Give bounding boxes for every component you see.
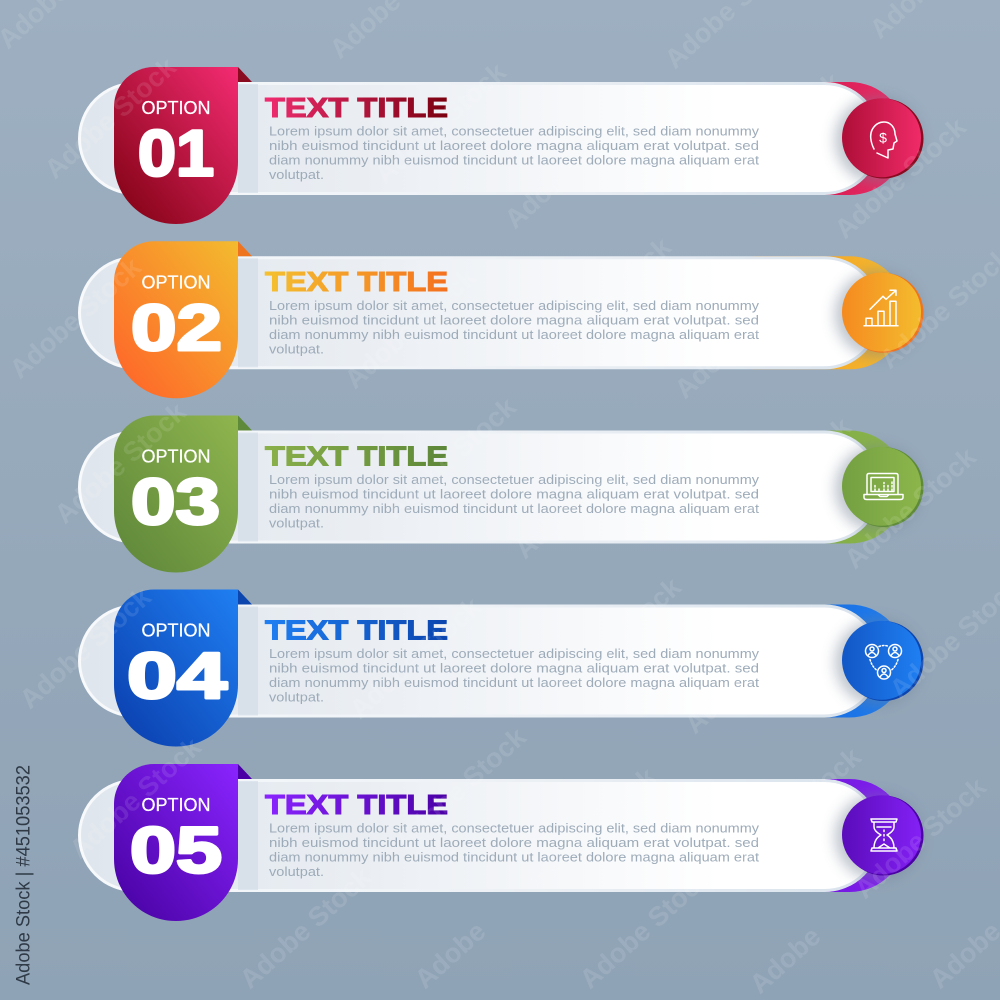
- watermark pattern: Adobe Stock: [499, 101, 642, 234]
- title 01: TEXT TITLE: [265, 92, 448, 123]
- title 04: TEXT TITLE: [265, 614, 448, 645]
- number 01: 01: [138, 116, 214, 190]
- body text 05: nibh euismod tincidunt ut laoreet dolore magna aliquam erat volutpat. sed: [269, 835, 759, 850]
- panel: option 01: [80, 67, 924, 224]
- body text 03: diam nonummy nibh euismod tincidunt ut laoreet dolore magna aliquam erat: [269, 501, 759, 516]
- stock id side label: Adobe Stock | #451053532: [14, 765, 34, 985]
- watermark pattern: Adobe Stock: [849, 771, 992, 904]
- watermark pattern: Adobe Stock: [379, 391, 522, 524]
- card 03: [80, 432, 921, 542]
- card 05: [80, 780, 921, 890]
- body text 04: Lorem ipsum dolor sit amet, consectetuer adipiscing elit, sed diam nonummy: [269, 646, 760, 661]
- icon badge 05: hourglass: [842, 795, 924, 876]
- body text 03: nibh euismod tincidunt ut laoreet dolore magna aliquam erat volutpat. sed: [269, 486, 759, 502]
- watermark pattern: Adobe Stock: [64, 731, 207, 864]
- ribbon 05: [114, 764, 252, 921]
- ribbon 03: [114, 416, 252, 572]
- body text 02: Lorem ipsum dolor sit amet, consectetuer adipiscing elit, sed diam nonummy: [269, 298, 760, 313]
- watermark pattern: Adobe Stock: [669, 271, 812, 404]
- title 02: TEXT TITLE: [265, 266, 448, 297]
- watermark pattern: Adobe Stock: [704, 66, 847, 199]
- panel: option 05: [80, 764, 924, 921]
- watermark pattern: Adobe Stock: [829, 111, 972, 244]
- icon badge 03: laptop: [842, 447, 924, 527]
- body text 05: volutpat.: [269, 864, 324, 879]
- option label 03: OPTION: [141, 446, 211, 466]
- body text 03: Lorem ipsum dolor sit amet, consectetuer adipiscing elit, sed diam nonummy: [269, 472, 760, 487]
- panel: option 02: [80, 241, 924, 398]
- option label 02: OPTION: [141, 272, 211, 292]
- watermark pattern: Adobe Stock: [724, 741, 867, 874]
- body text 01: volutpat.: [269, 167, 324, 182]
- number 05: 05: [130, 814, 222, 886]
- ribbon 01: [114, 67, 252, 224]
- option label 05: OPTION: [141, 795, 211, 815]
- watermark pattern: Adobe Stock: [14, 581, 157, 714]
- ribbon 04: [114, 590, 252, 746]
- back pill 02: [700, 256, 906, 369]
- body text 04: volutpat.: [269, 690, 324, 704]
- watermark pattern: Adobe Stock: [519, 761, 662, 894]
- watermark pattern: Adobe Stock: [49, 396, 192, 529]
- watermark pattern: Adobe Stock: [714, 411, 857, 544]
- body text 03: volutpat.: [269, 516, 324, 530]
- watermark pattern: Adobe: [744, 921, 826, 999]
- card 01: [80, 84, 921, 194]
- back pill 05: [700, 779, 906, 892]
- number 02: 02: [131, 291, 222, 364]
- body text 01: Lorem ipsum dolor sit amet, consectetuer adipiscing elit, sed diam nonummy: [269, 124, 760, 138]
- body text 05: Lorem ipsum dolor sit amet, consectetuer adipiscing elit, sed diam nonummy: [269, 820, 760, 836]
- body text 05: diam nonummy nibh euismod tincidunt ut laoreet dolore magna aliquam erat: [269, 850, 759, 864]
- watermark pattern: Adobe Stock: [234, 861, 377, 994]
- icon badge 01: head with dollar: [842, 98, 924, 178]
- option label 01: OPTION: [141, 98, 211, 118]
- back pill 01: [700, 82, 906, 195]
- body text 02: volutpat.: [269, 341, 324, 356]
- number 04: 04: [127, 639, 227, 712]
- watermark pattern: Adobe Stock: [509, 431, 652, 564]
- watermark pattern: Adobe Stock: [679, 606, 822, 739]
- watermark pattern: Adobe Stock: [4, 251, 147, 384]
- card 04: [80, 606, 921, 716]
- watermark pattern: Adobe Stock: [574, 861, 717, 994]
- body text 01: nibh euismod tincidunt ut laoreet dolore magna aliquam erat volutpat. sed: [269, 138, 759, 153]
- watermark pattern: Adobe: [409, 916, 491, 994]
- watermark pattern: Adobe Stock: [839, 441, 982, 574]
- watermark pattern: Adobe Stock: [544, 571, 687, 704]
- icon badge 04: people network: [842, 621, 924, 701]
- panel: option 03: [80, 416, 924, 572]
- back pill 03: [700, 430, 906, 544]
- panel: option 04: [80, 590, 924, 746]
- body text 02: nibh euismod tincidunt ut laoreet dolore magna aliquam erat volutpat. sed: [269, 312, 759, 327]
- icon badge 01: head with dollar: $: [879, 130, 887, 146]
- title 03: TEXT TITLE: [265, 440, 448, 471]
- ribbon 02: [114, 241, 252, 398]
- number 03: 03: [131, 465, 220, 538]
- body text 04: diam nonummy nibh euismod tincidunt ut laoreet dolore magna aliquam erat: [269, 675, 759, 690]
- body text 02: diam nonummy nibh euismod tincidunt ut laoreet dolore magna aliquam erat: [269, 327, 759, 342]
- watermark pattern: Adobe Stock: [339, 261, 482, 394]
- watermark pattern: Adobe Stock: [534, 231, 677, 364]
- watermark pattern: Adobe Stock: [344, 591, 487, 724]
- icon badge 02: growth chart: [842, 272, 924, 353]
- watermark pattern: Adobe Stock: [369, 56, 512, 189]
- body text 01: diam nonummy nibh euismod tincidunt ut laoreet dolore magna aliquam erat: [269, 152, 759, 168]
- title 05: TEXT TITLE: [265, 789, 448, 820]
- option label 04: OPTION: [141, 620, 211, 640]
- watermark pattern: Adobe Stock: [39, 51, 182, 184]
- watermark pattern: Adobe Stock: [389, 721, 532, 854]
- card 02: [80, 258, 921, 368]
- back pill 04: [700, 604, 906, 718]
- body text 04: nibh euismod tincidunt ut laoreet dolore magna aliquam erat volutpat. sed: [269, 660, 759, 676]
